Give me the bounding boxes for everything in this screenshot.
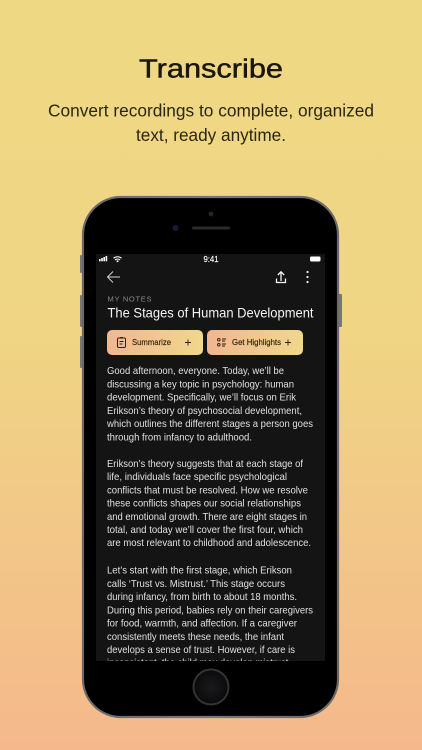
note body text: develops a sense of trust. However, if care is	[107, 645, 295, 656]
section label: MY NOTES	[108, 294, 152, 304]
note body text: Good afternoon, everyone. Today, we’ll be	[107, 366, 284, 377]
phone body	[83, 197, 338, 717]
button: get highlights: Get Highlights	[232, 337, 281, 347]
back arrow	[108, 272, 120, 282]
subtitle	[48, 100, 374, 145]
icon: list	[218, 338, 226, 346]
subtitle: text, ready anytime.	[136, 125, 286, 145]
note body text: calls ‘Trust vs. Mistrust.’ This stage occurs	[107, 579, 285, 590]
note body text: life, individuals face specific psychological	[107, 472, 287, 483]
signal icon	[99, 256, 107, 261]
button: get highlights	[207, 330, 303, 355]
clock: 9:41	[204, 255, 219, 264]
note body text: inconsistent, the child may develop mistrust.	[107, 658, 291, 669]
phone side buttons	[80, 255, 342, 368]
status bar	[99, 255, 320, 264]
more menu icon	[306, 271, 309, 283]
note body text	[106, 366, 313, 669]
note body text: Erikson’s theory of psychosocial development,	[107, 406, 302, 417]
share icon	[276, 272, 286, 282]
plus	[185, 340, 191, 346]
plus	[285, 340, 291, 346]
note body text: Erikson’s theory suggests that at each stage of	[107, 459, 303, 470]
note body text: which outlines the different stages a person goes	[106, 419, 313, 430]
note body text: Let’s start with the first stage, which Erikson	[107, 566, 292, 577]
note body text: these conflicts shapes our social relationships	[107, 499, 301, 510]
wifi icon	[114, 257, 122, 262]
note body text: development. Specifically, we’ll focus on Erik	[107, 392, 297, 404]
note body text: are most relevant to childhood and adolescence.	[107, 538, 311, 549]
note body text: conflicts that must be resolved. How we resolve	[107, 485, 308, 496]
battery icon	[310, 256, 320, 262]
note body text: for food, warmth, and affection. If a caregiver	[107, 619, 298, 630]
home button	[194, 670, 228, 704]
screen	[96, 254, 325, 661]
camera and speaker	[172, 212, 230, 231]
note body text: discussing a key topic in psychology: human	[107, 379, 294, 390]
title: Transcribe	[139, 56, 283, 84]
note heading: The Stages of Human Development	[108, 306, 314, 320]
note body text: total, and today we’ll cover the first four, which	[107, 525, 303, 536]
icon: document	[118, 338, 126, 348]
phone	[80, 197, 342, 717]
button: summarize	[107, 330, 203, 355]
note body text: During this period, babies rely on their caregivers	[107, 605, 313, 616]
button: summarize: Summarize	[132, 337, 171, 347]
note body text: consistently meets these needs, the infant	[107, 632, 284, 643]
note body text: through from infancy to adulthood.	[107, 432, 252, 443]
note body text: during infancy, from birth to about 18 months.	[107, 592, 297, 603]
subtitle: Convert recordings to complete, organized	[48, 100, 374, 120]
note body text: and emotional growth. There are eight stages in	[107, 512, 307, 523]
